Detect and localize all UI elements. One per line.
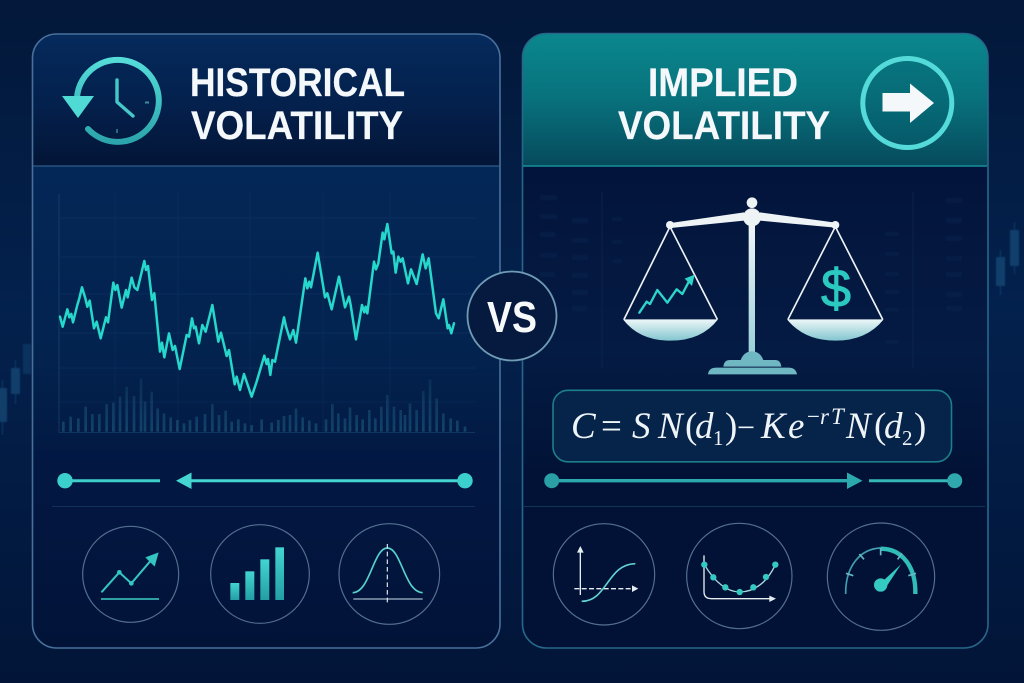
faint data table backdrop <box>540 195 962 344</box>
icon: bar chart <box>211 525 309 623</box>
formula box: − <box>807 404 820 429</box>
chart grid <box>59 194 475 433</box>
scale post <box>749 223 755 354</box>
icon: s-curve on axes <box>553 524 655 625</box>
right scale pan <box>787 227 884 341</box>
vs badge: VS <box>487 293 537 342</box>
formula box: ( <box>874 406 886 447</box>
icon: clock with counter-clockwise arrow <box>62 60 159 142</box>
panel header background <box>522 33 988 166</box>
formula box: N <box>845 406 873 447</box>
panel: implied volatility <box>522 33 988 648</box>
formula box: e <box>788 406 804 447</box>
footer background <box>32 450 500 648</box>
left scale pan <box>623 227 718 341</box>
icon: gauge <box>827 523 935 630</box>
background candlesticks <box>0 222 1019 435</box>
formula box: C <box>571 406 597 447</box>
panel body background <box>522 166 988 476</box>
icon: forward arrow in circle <box>863 58 952 148</box>
title: implied volatility <box>618 61 830 148</box>
formula box: 2 <box>902 426 912 450</box>
formula box: K <box>760 406 788 447</box>
vs badge <box>468 272 556 360</box>
formula box: 1 <box>713 426 724 450</box>
icon: volatility smile <box>687 523 792 629</box>
formula box <box>553 390 952 462</box>
title: historical volatility <box>190 61 405 148</box>
formula box: − <box>737 409 755 445</box>
title: implied volatility: VOLATILITY <box>618 104 830 148</box>
icon: balance scale <box>623 197 884 374</box>
footer background <box>522 476 988 648</box>
panel: historical volatility <box>32 34 500 648</box>
formula box: S <box>632 406 650 447</box>
formula box: = <box>601 406 622 447</box>
price line <box>60 224 454 397</box>
chart background <box>34 166 499 268</box>
formula box: r <box>820 404 830 429</box>
formula box: ) <box>914 406 926 447</box>
formula box: N <box>657 406 685 447</box>
arrow: timeline pointing backward <box>57 472 473 489</box>
icon: trend line <box>83 526 179 622</box>
panel header background <box>32 34 500 166</box>
arrow: timeline pointing forward <box>544 472 962 489</box>
icon: dollar sign: $ <box>821 259 851 319</box>
title: historical volatility: VOLATILITY <box>191 104 403 148</box>
formula box: ( <box>685 406 697 447</box>
formula box: d <box>884 406 903 447</box>
icon: bell curve <box>339 524 440 624</box>
title: historical volatility: HISTORICAL <box>190 61 405 105</box>
formula box: d <box>695 406 714 447</box>
volume bars <box>63 378 465 432</box>
scale beam <box>666 197 839 229</box>
title: implied volatility: IMPLIED <box>648 61 798 105</box>
line chart: historical price series <box>59 194 475 433</box>
formula box: ) <box>725 406 737 447</box>
scale base <box>708 351 797 374</box>
formula box: T <box>831 404 846 429</box>
